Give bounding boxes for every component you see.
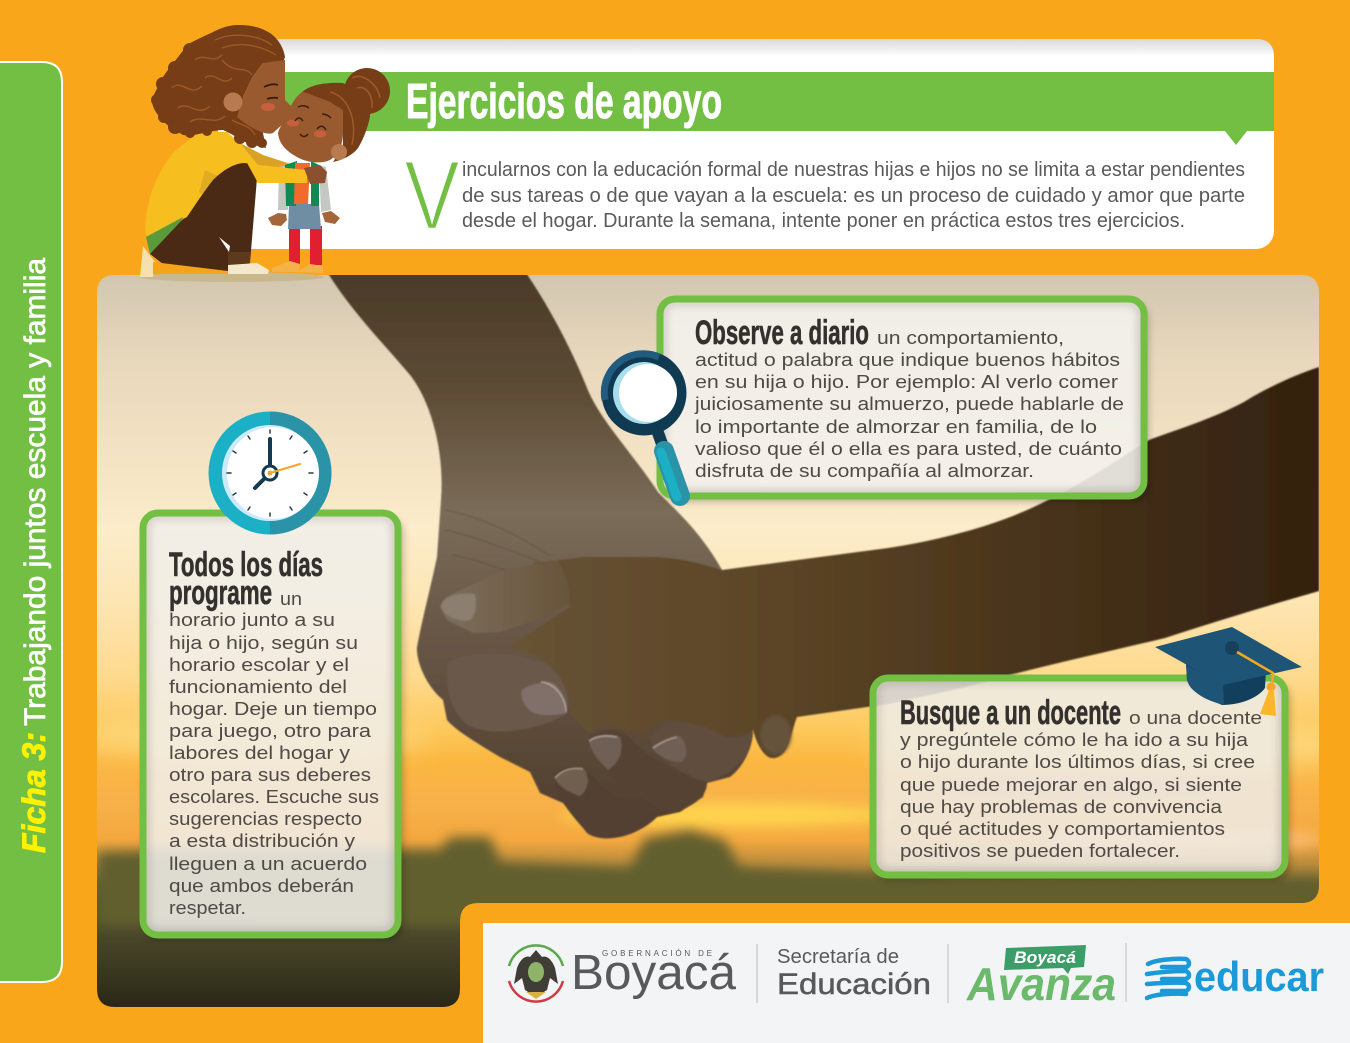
card: Observe a diario: [660, 299, 1148, 501]
wrist creases: [446, 510, 538, 548]
daughter: [268, 68, 390, 273]
icon: graduation cap: [1155, 627, 1302, 716]
card: Busque a un docente: [873, 678, 1290, 880]
card body text: otro para sus deberes: [169, 764, 371, 785]
daughter legs: [289, 226, 322, 265]
icon: clock: [208, 412, 332, 534]
sunset photo with holding hands: [70, 270, 1350, 1007]
logo: Secretaría de Educación: Secretaría de: [777, 946, 899, 968]
logo: educar: educar: [1194, 953, 1324, 1000]
card body text: hogar. Deje un tiempo: [169, 698, 377, 719]
card heading: Todos los días: [169, 546, 323, 584]
card body text: o qué actitudes y comportamientos: [900, 818, 1225, 839]
side tab: Ficha 3: [0, 62, 62, 982]
adult arm and hand: [326, 270, 753, 838]
illustration: mother kissing daughter: [140, 25, 390, 282]
logo: Boyacá Avanza: Avanza: [966, 958, 1116, 1010]
card body text: o hijo durante los últimos días, si cree: [900, 751, 1255, 772]
tree line: [97, 830, 1319, 925]
mother arm hug: [240, 150, 307, 183]
daughter face: [278, 92, 343, 162]
daughter hair: [302, 68, 390, 162]
header band: [285, 72, 1274, 145]
card body text: lo importante de almorzar en familia, de lo: [695, 416, 1097, 437]
card body text: un comportamiento,: [877, 327, 1064, 348]
logo: Boyacá Avanza: Boyacá: [1014, 948, 1076, 967]
card heading: Observe a diario: [695, 314, 869, 352]
mother hair: [151, 25, 285, 148]
ground shadow: [140, 272, 324, 282]
intro text: de sus tareas o de que vayan a la escuela: es un proceso de cuidado y amor que parte: [462, 185, 1245, 207]
card body text: horario junto a su: [169, 609, 335, 630]
tab label: Ficha 3: Ficha 3:: [16, 732, 52, 853]
card body text: respetar.: [169, 897, 246, 918]
logo: Secretaría de Educación: [777, 946, 931, 1001]
card body text: hija o hijo, según su: [169, 632, 358, 653]
daughter skirt: [288, 204, 321, 229]
card heading: Busque a un docente: [900, 694, 1121, 732]
card body text: positivos se pueden fortalecer.: [900, 840, 1180, 861]
logo: Gobernación de Boyacá: GOBERNACIÓN DE: [602, 949, 712, 958]
card body text: funcionamiento del: [169, 676, 347, 697]
card body text: escolares. Escuche sus: [169, 786, 379, 807]
card body text: que hay problemas de convivencia: [900, 796, 1223, 817]
card: Todos los días programe: [143, 513, 403, 940]
card body text: a esta distribución y: [169, 830, 356, 851]
intro text: [462, 159, 1245, 232]
intro text: incularnos con la educación formal de nuestras hijas e hijos no se limita a estar pendientes: [462, 159, 1245, 181]
logo: Secretaría de Educación: Educación: [777, 968, 931, 1001]
mother face: [237, 60, 292, 134]
card body text: horario escolar y el: [169, 654, 349, 675]
card body text: un: [280, 588, 302, 609]
holding hands: [326, 270, 1319, 838]
trousers: [150, 163, 257, 273]
card heading: [169, 546, 323, 612]
child arm and hand: [510, 367, 1319, 758]
card body text: [694, 327, 1124, 481]
card body text: labores del hogar y: [169, 742, 351, 763]
card body text: juiciosamente su almuerzo, puede hablarle de: [694, 393, 1124, 414]
sweater: [145, 132, 308, 240]
card body text: en su hija o hijo. Por ejemplo: Al verlo comer: [695, 371, 1118, 392]
nail tips: [541, 682, 677, 778]
card heading: programe: [169, 574, 272, 612]
card body text: sugerencias respecto: [169, 808, 362, 829]
card body text: [169, 588, 379, 918]
logo: Gobernación de Boyacá: Boyacá: [571, 946, 737, 1000]
mother: [140, 25, 308, 277]
daughter sleeves and hands: [278, 165, 331, 212]
card body text: y pregúntele cómo le ha ido a su hija: [900, 729, 1249, 750]
intro text: desde el hogar. Durante la semana, intente poner en práctica estos tres ejercicios.: [462, 210, 1185, 232]
card body text: para juego, otro para: [169, 720, 372, 741]
card body text: disfruta de su compañía al almorzar.: [695, 460, 1034, 481]
icon: magnifying glass: [602, 350, 686, 497]
daughter vest: [285, 161, 319, 206]
adult thumb: [440, 560, 570, 633]
logo: Boyacá crest: [509, 945, 563, 1002]
card body text: que ambos deberán: [169, 875, 354, 896]
tab label: Trabajando juntos escuela y familia: Trabajando juntos escuela y familia: [19, 258, 52, 726]
title: Ejercicios de apoyo: [406, 75, 722, 129]
header panel: [218, 39, 1274, 250]
drop cap: V: [404, 140, 460, 250]
card body text: lleguen a un acuerdo: [169, 853, 367, 874]
footer panel: [483, 923, 1350, 1043]
card body text: [900, 707, 1262, 861]
shoes: [228, 263, 269, 274]
card body text: valioso que él o ella es para usted, de cuánto: [695, 438, 1122, 459]
card body text: actitud o palabra que indique buenos hábitos: [695, 349, 1120, 370]
card body text: o una docente: [1129, 707, 1262, 728]
card body text: que puede mejorar en algo, si siente: [900, 774, 1242, 795]
adult fingers: [447, 654, 752, 838]
